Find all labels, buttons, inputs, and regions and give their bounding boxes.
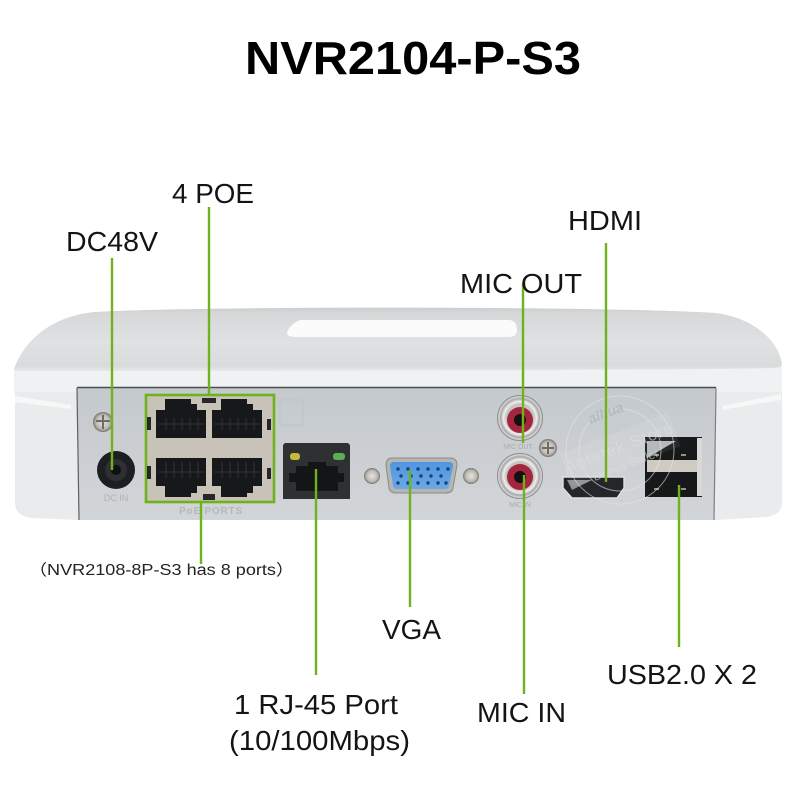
power jack marking: DC IN: [104, 493, 128, 503]
callout line: PoE note: [200, 502, 202, 564]
label: 4 POE: 4 POE: [172, 178, 254, 209]
MIC IN jack: [497, 453, 543, 499]
callout line: HDMI: [605, 243, 607, 482]
PoE port 4: [212, 458, 262, 497]
USB ports: [645, 437, 702, 497]
callout line: VGA: [409, 470, 411, 607]
PoE port 2: [212, 399, 262, 438]
PoE port 1: [156, 399, 206, 438]
front band: [14, 366, 782, 392]
label: DC48V: DC48V: [66, 226, 158, 257]
label: RJ-45 port: (10/100Mbps): [229, 725, 410, 756]
rear panel: [77, 388, 716, 520]
store watermark: [549, 384, 682, 504]
device body: [15, 364, 782, 520]
MIC OUT jack: [497, 395, 543, 441]
callout line: RJ-45: [315, 469, 317, 675]
NVR device: [14, 308, 782, 520]
lid recess: [287, 320, 517, 337]
VGA screw right: [463, 468, 479, 484]
PoE port 3: [156, 458, 206, 497]
RJ-45 port: [283, 443, 350, 499]
power jack: [97, 451, 135, 489]
VGA screw left: [364, 468, 380, 484]
store watermark: Dahua Seller: [591, 446, 661, 484]
port number box: [280, 400, 303, 425]
store watermark: Aotetek Store: [562, 418, 677, 477]
label: RJ-45 port: [229, 689, 410, 756]
PoE port block: [146, 395, 274, 502]
label: HDMI: HDMI: [568, 205, 642, 236]
title: NVR2104-P-S3: [245, 32, 581, 84]
port clips: [147, 398, 271, 500]
callout line: MIC IN: [523, 475, 525, 694]
ground screw: [93, 412, 113, 432]
lid: [14, 308, 782, 371]
side ledges: [15, 394, 781, 410]
HDMI port: [563, 477, 624, 498]
audio screw: [539, 439, 557, 457]
store watermark: alhua: [586, 399, 626, 427]
callout line: MIC OUT: [522, 283, 524, 443]
callout line: DC48V: [111, 258, 113, 470]
PoE marking: PoE PORTS: [179, 506, 243, 517]
label: MIC OUT: MIC OUT: [460, 268, 582, 299]
callout line: 4 POE: [208, 207, 210, 395]
callout line: USB: [678, 485, 680, 647]
VGA port: [386, 458, 457, 493]
label: VGA: VGA: [382, 614, 441, 645]
port contacts: [158, 418, 260, 478]
note: 8 port model: （NVR2108-8P-S3 has 8 ports）: [29, 562, 294, 579]
MIC OUT marking: MIC OUT: [503, 444, 533, 451]
label: USB2.0 X 2: USB2.0 X 2: [607, 659, 757, 690]
label: MIC IN: MIC IN: [477, 697, 566, 728]
MIC IN marking: MIC IN: [509, 502, 531, 509]
label: RJ-45 port: 1 RJ-45 Port: [234, 689, 398, 720]
